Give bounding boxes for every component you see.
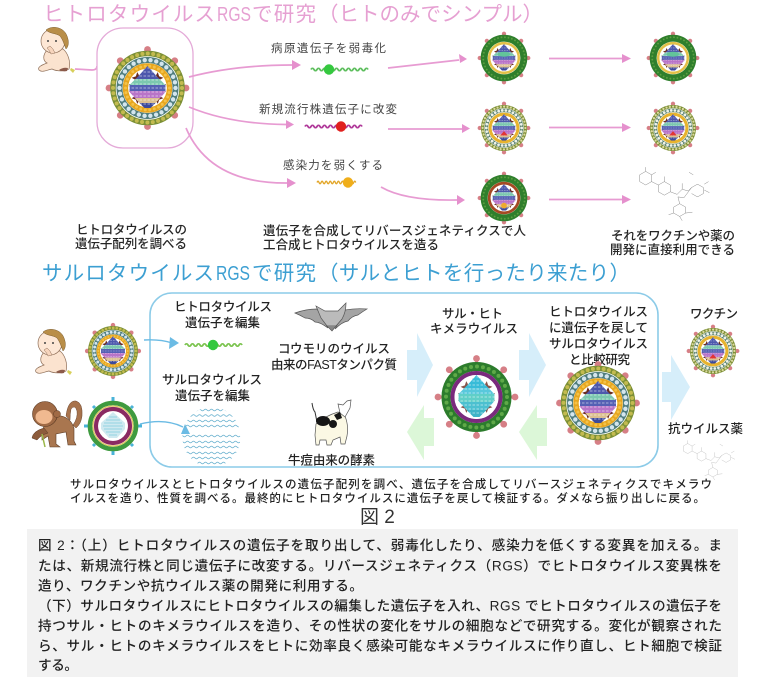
caption text: ら、サル・ヒトのキメラウイルスをヒトに効率良く感染可能なキメラウイルスに作り直し、ヒト細胞で検証	[38, 638, 722, 654]
icon: cow	[312, 400, 351, 445]
arrow: to new strain gene	[189, 107, 294, 129]
arrow: to low infectivity gene	[186, 128, 296, 188]
label: edit human gene: 遺伝子を編集	[185, 315, 260, 330]
title: human rotavirus RGS: RGS	[217, 3, 251, 26]
label: weaken infectivity: 感染力を弱くする	[283, 158, 383, 172]
caption text: （下）サルロタウイルスにヒトロタウイルスの編集した遺伝子を入れ、RGS でヒトロタウイルスの遺伝子を	[38, 598, 722, 614]
caption: direct use: 開発に直接利用できる	[610, 242, 735, 257]
caption panel	[27, 529, 738, 677]
virus: simian rotavirus	[84, 397, 142, 455]
virus: product new strain	[647, 102, 699, 154]
text block: summary: サルロタウイルスとヒトロタウイルスの遺伝子配列を調べ、遺伝子を合成してリバースジェネティクスでキメラウ	[70, 477, 712, 491]
caption background	[27, 529, 738, 677]
gene: edited human gene	[185, 340, 242, 350]
icon: baby	[36, 329, 72, 375]
caption: read gene sequence: 遺伝子配列を調べる	[75, 236, 187, 251]
molecule: antiviral	[683, 440, 735, 480]
label: compare: と比較研究	[569, 352, 630, 367]
arrow: row 1 to product	[549, 54, 631, 63]
label: chimera virus: キメラウイルス	[430, 322, 518, 336]
panel: simian rotavirus pipeline	[32, 293, 743, 480]
label: compare: に遺伝子を戻して	[549, 320, 648, 335]
gene: red	[305, 121, 362, 132]
title: human rotavirus RGS	[43, 3, 543, 26]
icon: monkey	[32, 401, 82, 447]
label: compare: ヒトロタウイルス	[549, 305, 648, 319]
label: cowpox enzyme: 牛痘由来の酵素	[288, 452, 375, 468]
title: simian rotavirus RGS: （サルとヒトを行ったり来たり）	[318, 262, 630, 285]
title: simian rotavirus RGS	[42, 262, 630, 285]
molecule: drug	[640, 167, 709, 221]
label: chimera virus: サル・ヒト	[442, 307, 503, 321]
arrow: to attenuated gene	[189, 60, 301, 77]
virus: low infectivity	[478, 172, 530, 224]
panel: human rotavirus pipeline	[39, 27, 735, 257]
arrow: human gene to editing	[144, 337, 179, 349]
arrow: forward 1	[407, 333, 433, 397]
caption text: たは、新規流行株と同じ遺伝子に改変する。リバースジェネティクス（RGS）でヒトロタウイルス変異株を	[38, 558, 722, 574]
caption text: 図 2：（上）ヒトロタウイルスの遺伝子を取り出して、弱毒化したり、感染力を低くする変異を加える。ま	[38, 537, 722, 553]
arrow: gene to virus row 3	[381, 187, 465, 205]
label: new strain: 新規流行株遺伝子に改変	[259, 102, 398, 116]
connector: baby to virus frame	[75, 66, 97, 70]
label: antiviral: 抗ウイルス薬	[668, 421, 743, 436]
caption text: 持つサル・ヒトのキメラウイルスを造り、その性状の変化をサルの細胞などで研究する。変化が観察された	[38, 618, 722, 634]
arrow: to products	[662, 355, 690, 420]
arrow: gene to virus row 1	[388, 54, 467, 68]
label: vaccine: ワクチン	[690, 307, 738, 321]
arrow: row 2 to product	[549, 123, 631, 132]
virus: human rotavirus reverted	[556, 361, 640, 445]
text block: summary: イルスを造り、性質を調べる。最終的にヒトロタウイルスに遺伝子を戻して検証する。ダメなら振り出しに戻る。	[70, 491, 705, 505]
arrow: gene to virus row 2	[388, 124, 470, 133]
caption text: 造り、ワクチンや抗ウイルス薬の開発に利用する。	[38, 578, 363, 594]
title: simian rotavirus RGS: サルロタウイルス	[42, 262, 214, 285]
caption text: する。	[38, 658, 78, 673]
virus: product attenuated	[647, 32, 699, 84]
virus: chimera	[435, 355, 518, 439]
virus: vaccine	[687, 325, 739, 377]
gene: orange	[317, 177, 356, 188]
caption: synthesize genes: 工合成ヒトロタウイルスを造る	[263, 237, 439, 252]
virus: new strain	[478, 102, 530, 154]
caption: direct use: それをワクチンや薬の	[611, 229, 735, 243]
caption: read gene sequence: ヒトロタウイルスの	[76, 223, 187, 237]
arrow: simian gene to editing	[140, 422, 190, 434]
icon: baby	[39, 27, 75, 73]
title: simian rotavirus RGS: で研究	[252, 262, 316, 285]
frame around human rotavirus	[97, 28, 193, 148]
label: edit simian gene: 遺伝子を編集	[175, 388, 250, 403]
icon: bat	[295, 303, 367, 331]
title: human rotavirus RGS: （ヒトのみでシンプル）	[318, 3, 543, 26]
title: human rotavirus RGS: ヒトロタウイルス	[43, 3, 215, 26]
arrow: back 1	[407, 405, 434, 460]
title: simian rotavirus RGS: RGS	[216, 262, 250, 285]
label: FAST protein: コウモリのウイルス	[278, 342, 390, 356]
frame: editing workflow	[150, 293, 658, 467]
label: edit human gene: ヒトロタウイルス	[174, 300, 272, 314]
label: attenuate: 病原遺伝子を弱毒化	[271, 41, 386, 55]
virus: human rotavirus source	[85, 323, 141, 379]
arrow: forward 2	[519, 333, 546, 397]
virus: human rotavirus	[106, 46, 189, 130]
label: FAST protein: 由来のFASTタンパク質	[271, 357, 397, 372]
figure number: 図 2	[360, 507, 395, 528]
arrow: back 2	[519, 405, 547, 460]
arrow: row 3 to product	[549, 195, 631, 204]
caption: synthesize genes: 遺伝子を合成してリバースジェネティクスで人	[263, 223, 526, 238]
gene: green	[311, 64, 368, 75]
label: compare: サルロタウイルス	[549, 337, 648, 351]
virus: attenuated	[478, 32, 530, 84]
title: human rotavirus RGS: で研究	[252, 3, 316, 26]
label: edit simian gene: サルロタウイルス	[162, 373, 262, 387]
gene: simian gene segments	[180, 409, 240, 464]
